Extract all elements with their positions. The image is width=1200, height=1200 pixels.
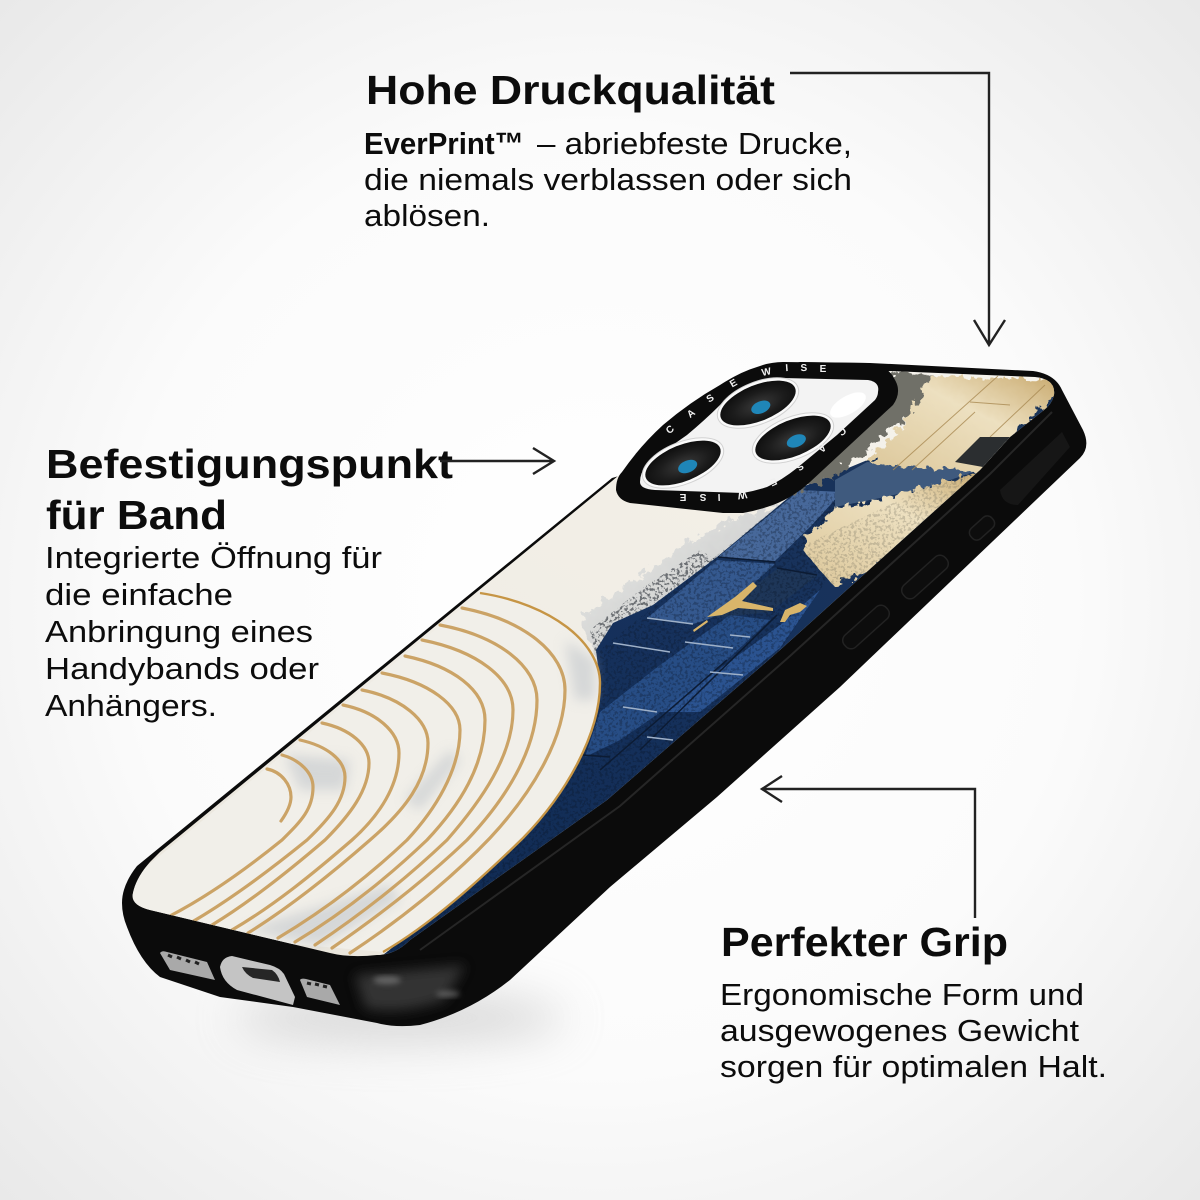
charging port (220, 956, 295, 1005)
lower blue block (585, 615, 770, 757)
arrow (790, 73, 1005, 345)
gold flecks (693, 582, 807, 632)
ring lettering: S (705, 392, 717, 405)
mid blue block upper (718, 490, 842, 561)
glossy corner highlight (355, 965, 465, 1011)
camera ring (616, 362, 898, 513)
fine texture on gold (800, 470, 985, 585)
heading (46, 441, 453, 538)
ring lettering: E (728, 377, 740, 390)
heading: Hohe Druckqualität (366, 67, 775, 113)
description: Integrierte Öffnung für (45, 540, 382, 575)
callout: print quality (364, 67, 1005, 345)
callout: strap mount (45, 441, 554, 723)
case body (122, 362, 1086, 1026)
description: Anhängers. (45, 688, 217, 723)
description (364, 126, 852, 233)
description: Ergonomische Form und (720, 977, 1084, 1012)
camera bump (616, 362, 898, 513)
charging port opening (242, 967, 280, 982)
arrow (440, 448, 554, 474)
description: – abriebfeste Drucke, (537, 126, 852, 161)
ring lettering: C (835, 424, 848, 437)
lens left (635, 427, 731, 499)
bottom blue block (660, 590, 820, 712)
ring lettering: E (767, 475, 778, 488)
description: sorgen für optimalen Halt. (720, 1049, 1107, 1084)
camera window (640, 378, 878, 493)
gold outer edge (383, 593, 600, 952)
strap side recess (1000, 432, 1070, 505)
flash (826, 387, 870, 423)
description: EverPrint™ (364, 126, 524, 161)
ring lettering: I (785, 363, 789, 374)
speckled paint transition (580, 505, 790, 660)
gold lower block (800, 470, 985, 585)
phone case (120, 360, 1086, 1026)
left speaker (160, 951, 215, 980)
heading: für Band (46, 492, 227, 538)
description (720, 977, 1107, 1084)
heading: Befestigungspunkt (46, 441, 453, 487)
ring lettering: W (761, 366, 773, 379)
ring lettering (664, 363, 848, 502)
ring lettering: S (699, 491, 706, 502)
bottom ports (160, 951, 340, 1005)
plank and streak lines on navy (583, 557, 817, 770)
grey washes on arcs (245, 640, 595, 945)
dark square patch (955, 437, 1010, 467)
arrow (762, 776, 975, 918)
ring lettering: E (679, 491, 686, 502)
ring lettering: S (800, 363, 808, 374)
heading: Perfekter Grip (721, 919, 1008, 965)
lens right (745, 402, 841, 474)
description: Anbringung eines (45, 614, 313, 649)
plank lines on gold (893, 376, 1045, 470)
ring lettering: I (717, 491, 721, 502)
description: ablösen. (364, 198, 490, 233)
bright highlight spots (373, 976, 460, 997)
ring lettering: W (736, 488, 748, 501)
description: ausgewogenes Gewicht (720, 1013, 1079, 1048)
side buttons (840, 513, 997, 652)
dark specks on transition (590, 550, 715, 654)
navy paint area (383, 380, 1060, 965)
right speaker (300, 979, 340, 1005)
callout: grip (720, 776, 1107, 1084)
description (45, 540, 382, 723)
white arc shape (132, 716, 595, 952)
ring lettering: A (685, 407, 698, 421)
ring lettering: C (664, 424, 677, 437)
muted blue patch (835, 462, 985, 507)
cream base (120, 360, 1070, 970)
gold arcs (168, 608, 565, 953)
mid blue block middle (647, 560, 775, 624)
drop shadow under phone (235, 992, 565, 1044)
grain over navy (383, 488, 880, 965)
description: Handybands oder (45, 651, 319, 686)
dark blue block (712, 569, 818, 618)
grey-brown smudge near camera (793, 372, 936, 496)
ring lettering: E (820, 364, 827, 375)
description: die niemals verblassen oder sich (364, 162, 852, 197)
ring lettering: A (815, 441, 828, 454)
printed artwork (120, 360, 1070, 970)
gold upper block (867, 376, 1056, 472)
side edge highlight (420, 412, 1052, 950)
ring lettering: S (793, 460, 805, 473)
description: die einfache (45, 577, 233, 612)
lens top (710, 367, 806, 439)
